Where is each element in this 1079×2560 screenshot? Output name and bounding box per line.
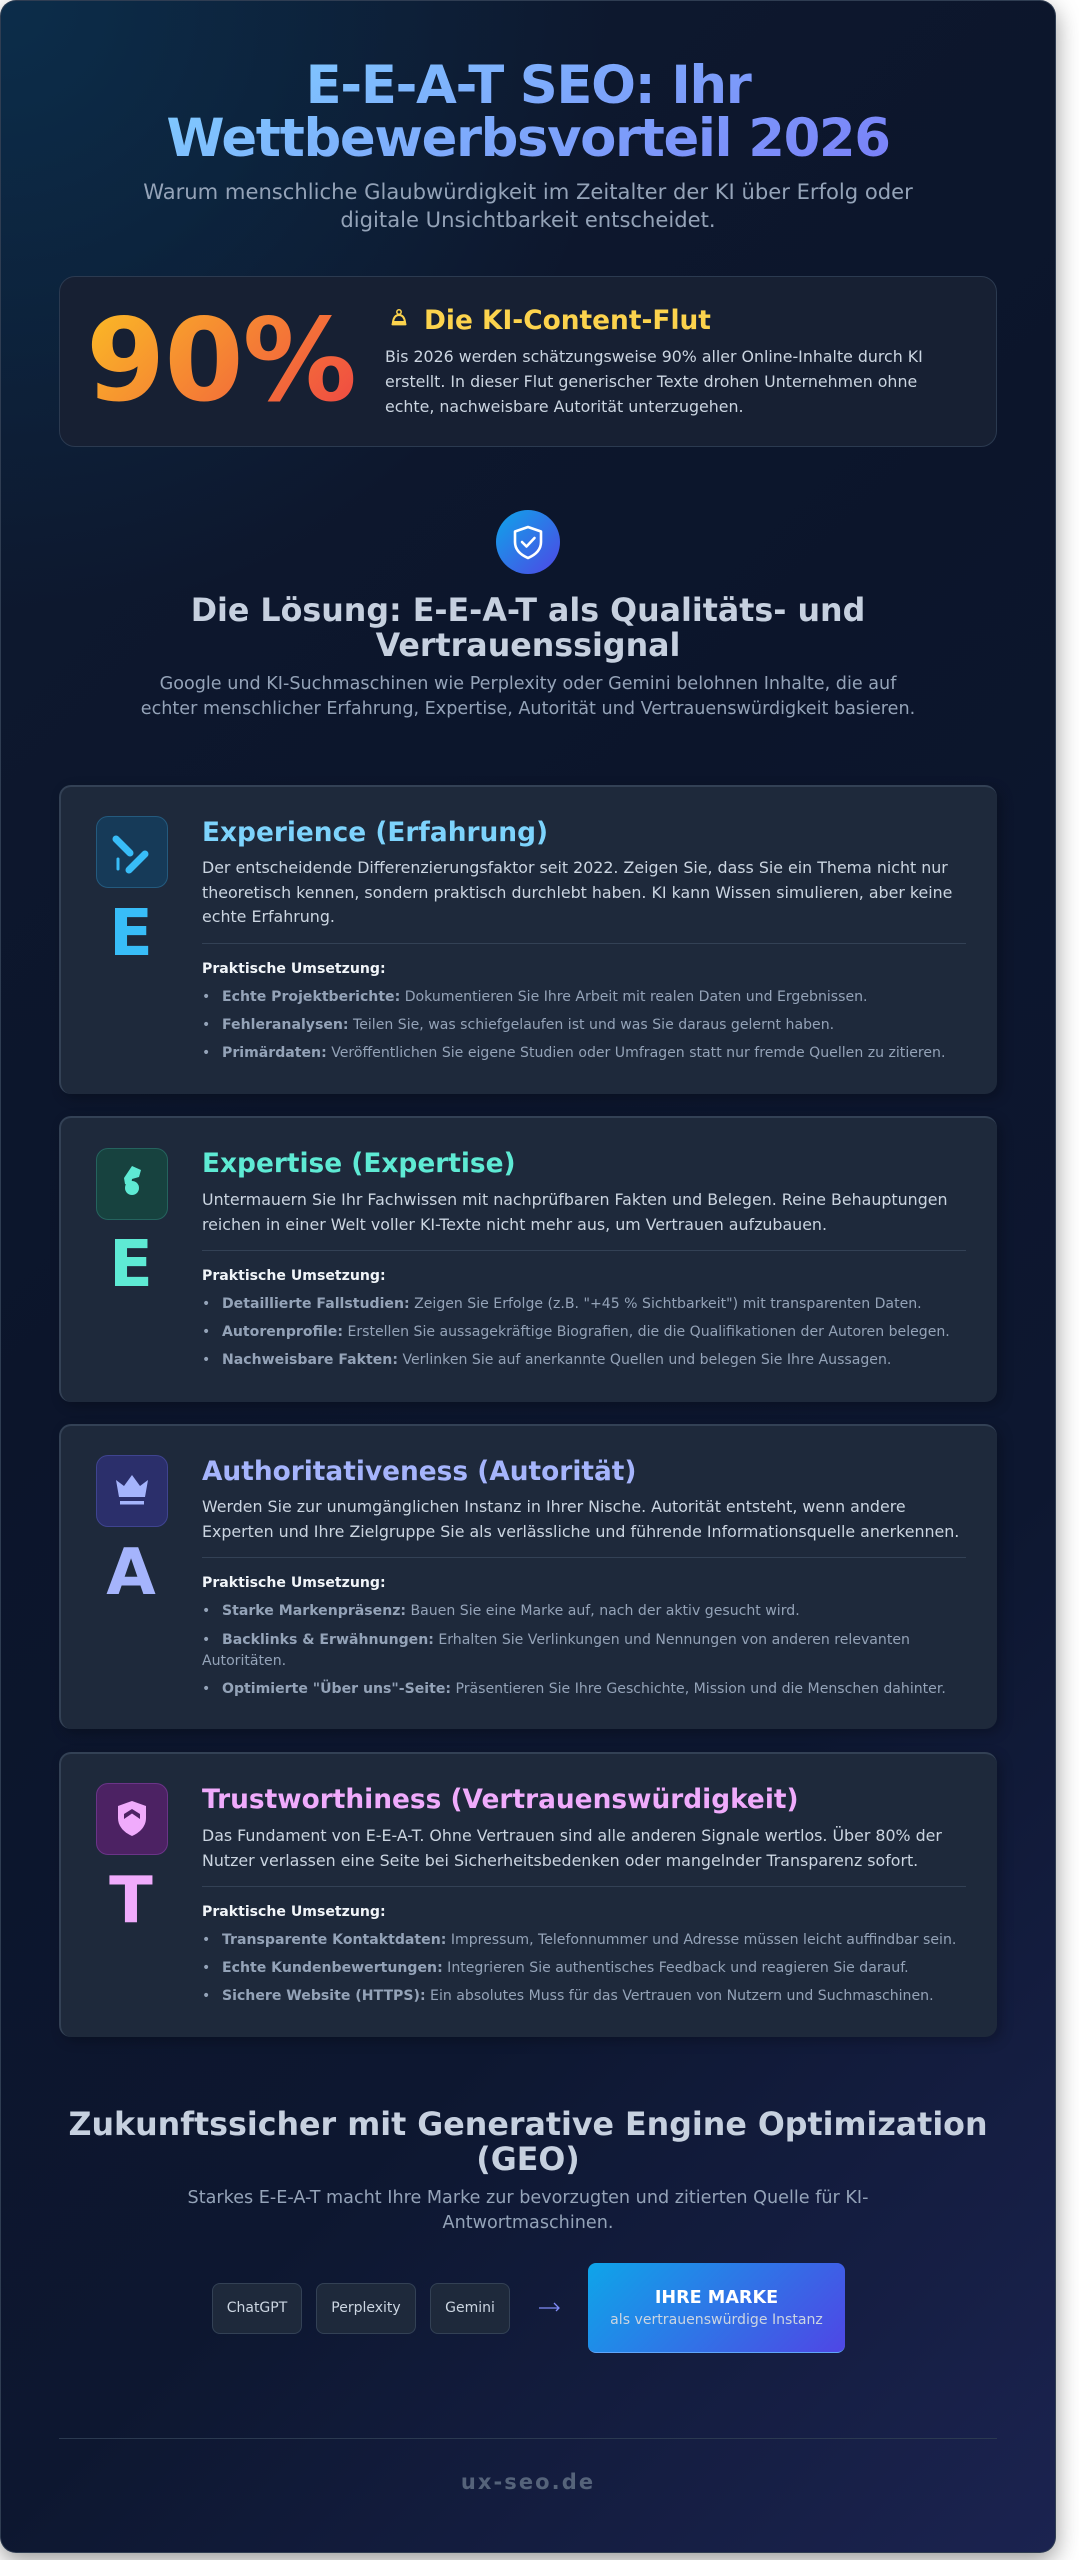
subtitle: digitale Unsichtbarkeit entscheidet. [340, 207, 716, 232]
text: Expertise description: Untermauern Sie Ihr Fachwissen mit nachprüfbaren Fakten und Belegen. Reine Behauptungen [202, 1190, 948, 1209]
list item: Backlinks & Erwähnungen: Erhalten Sie Verlinkungen und Nennungen von anderen relevanten [222, 1632, 910, 1648]
list item: • [202, 1045, 210, 1061]
letter E: E [109, 1228, 153, 1302]
list item: • [202, 1681, 210, 1697]
list item: • [202, 1603, 210, 1619]
icon: shield check [496, 510, 560, 574]
list item: Echte Kundenbewertungen: Integrieren Sie authentisches Feedback und reagieren Sie darauf. [222, 1960, 909, 1976]
text: Expertise description [202, 1190, 948, 1234]
text: Experience description: theoretisch kennen, sondern praktisch durchlebt haben. KI kann Wissen simulieren, aber keine [202, 883, 952, 902]
heading: Trustworthiness: Trustworthiness (Vertrauenswürdigkeit) [202, 1784, 799, 1815]
text: GEO description: Starkes E-E-A-T macht Ihre Marke zur bevorzugten und zitierten Quelle für KI- [188, 2188, 868, 2208]
text: Expertise description: reichen in einer Welt voller KI-Texte nicht mehr aus, um Vertrauen aufzubauen. [202, 1215, 827, 1234]
text: Authoritativeness description: Experten und Ihre Zielgruppe Sie als verlässliche und führende Informationsquelle anerkennen. [202, 1522, 959, 1541]
list item: Nachweisbare Fakten: Verlinken Sie auf anerkannte Quellen und belegen Sie Ihre Aussagen. [222, 1352, 891, 1368]
icon: Authoritativeness [96, 1455, 168, 1527]
list item: Sichere Website (HTTPS): Ein absolutes Muss für das Vertrauen von Nutzern und Suchmaschinen. [222, 1988, 934, 2004]
label: Praktische Umsetzung: Praktische Umsetzung: [202, 1904, 386, 1920]
list item: • [202, 1017, 210, 1033]
brand subtitle: als vertrauenswürdige Instanz [610, 2312, 823, 2328]
list item: Fehleranalysen: Teilen Sie, was schiefgelaufen ist und was Sie daraus gelernt haben. [222, 1017, 834, 1033]
list item: • [202, 1296, 210, 1312]
text: Trustworthiness description [202, 1826, 942, 1870]
subtitle [143, 179, 913, 232]
list item: • [202, 1932, 210, 1948]
list item: • [202, 1352, 210, 1368]
label: Praktische Umsetzung: Praktische Umsetzung: [202, 1268, 386, 1284]
icon: Expertise [96, 1148, 168, 1220]
heading: Expertise: Expertise (Expertise) [202, 1148, 516, 1179]
panel: KI-Content-Flut statistic [59, 276, 997, 447]
label: Praktische Umsetzung: Praktische Umsetzung: [202, 961, 386, 977]
icon: Trustworthiness [96, 1783, 168, 1855]
text: Experience description: echte Erfahrung. [202, 907, 335, 926]
heading: Die Lösung [191, 593, 865, 664]
text: Experience description: Der entscheidende Differenzierungsfaktor seit 2022. Zeigen Sie, dass Sie ein Thema nicht nur [202, 858, 948, 877]
list item: Starke Markenpräsenz: Bauen Sie eine Marke auf, nach der aktiv gesucht wird. [222, 1603, 800, 1619]
chip: Gemini: Gemini [445, 2300, 495, 2316]
arrow [539, 2302, 560, 2312]
text: Lösung description [141, 674, 915, 719]
letter E: E [109, 897, 153, 971]
letter T: T [109, 1864, 153, 1938]
text: Authoritativeness description [202, 1497, 959, 1541]
subtitle: Warum menschliche Glaubwürdigkeit im Zeitalter der KI über Erfolg oder [143, 179, 913, 204]
list item: Primärdaten: Veröffentlichen Sie eigene Studien oder Umfragen statt nur fremde Quellen zu zitieren. [222, 1045, 945, 1061]
list item [202, 1632, 910, 1669]
big number 90%: 90% [86, 294, 356, 427]
letter A: A [106, 1536, 156, 1610]
brand box [588, 2263, 845, 2353]
heading: Die Lösung: Die Lösung: E-E-A-T als Qualitäts- und [191, 593, 865, 629]
heading: GEO: Zukunftssicher mit Generative Engine Optimization [68, 2107, 988, 2143]
heading: GEO: (GEO) [476, 2142, 580, 2178]
list item: Echte Projektberichte: Dokumentieren Sie Ihre Arbeit mit realen Daten und Ergebnissen. [222, 989, 868, 1005]
panel: Expertise card [59, 1116, 997, 1402]
chip: ChatGPT: ChatGPT [227, 2300, 287, 2316]
chip: Perplexity: Perplexity [331, 2300, 401, 2316]
list item: Autorenprofile: Erstellen Sie aussagekräftige Biografien, die die Qualifikationen der Autoren belegen. [222, 1324, 950, 1340]
description [385, 347, 923, 416]
panel: Trustworthiness card [59, 1752, 997, 2037]
panel: Authoritativeness card [59, 1424, 997, 1729]
text: Authoritativeness description: Werden Sie zur unumgänglichen Instanz in Ihrer Nische. Autorität entsteht, wenn andere [202, 1497, 906, 1516]
list item: Detaillierte Fallstudien: Zeigen Sie Erfolge (z.B. "+45 % Sichtbarkeit") mit transparenten Daten. [222, 1296, 922, 1312]
text: Experience description [202, 858, 952, 926]
description: erstellt. In dieser Flut generischer Texte drohen Unternehmen ohne [385, 372, 917, 391]
list item: Autoritäten. [202, 1653, 286, 1669]
description: Bis 2026 werden schätzungsweise 90% aller Online-Inhalte durch KI [385, 347, 923, 366]
brand title: IHRE MARKE [655, 2288, 778, 2308]
title [166, 55, 890, 169]
footer: ux-seo.de: ux-seo.de [461, 2470, 595, 2494]
icon: Experience [96, 816, 168, 888]
chip: Gemini [430, 2283, 510, 2334]
text: Trustworthiness description: Nutzer verlassen eine Seite bei Sicherheitsbedenken oder mangelnder Transparenz sofort. [202, 1851, 918, 1870]
title: Wettbewerbsvorteil 2026 [166, 108, 890, 169]
text: GEO description [188, 2188, 868, 2233]
heading: Experience: Experience (Erfahrung) [202, 817, 548, 848]
icon: bell [392, 309, 406, 326]
list item: • [202, 1632, 210, 1648]
heading: GEO [68, 2107, 988, 2178]
list item: Transparente Kontaktdaten: Impressum, Telefonnummer und Adresse müssen leicht auffindbar sein. [222, 1932, 956, 1948]
list item: • [202, 1324, 210, 1340]
text: GEO description: Antwortmaschinen. [443, 2213, 613, 2233]
chip: ChatGPT [212, 2283, 302, 2334]
description: echte, nachweisbare Autorität unterzugehen. [385, 397, 744, 416]
list item: • [202, 1988, 210, 2004]
text: Trustworthiness description: Das Fundament von E-E-A-T. Ohne Vertrauen sind alle anderen Signale wertlos. Über 80% der [202, 1826, 942, 1845]
heading: Die Lösung: Vertrauenssignal [376, 628, 680, 664]
title: E-E-A-T SEO: Ihr [306, 55, 750, 116]
list item: • [202, 1960, 210, 1976]
list item: • [202, 989, 210, 1005]
chip: Perplexity [316, 2283, 416, 2334]
label: Praktische Umsetzung: Praktische Umsetzung: [202, 1575, 386, 1591]
text: Lösung description: Google und KI-Suchmaschinen wie Perplexity oder Gemini belohnen Inhalte, die auf [160, 674, 896, 694]
panel: Experience card [59, 785, 997, 1094]
list item: Optimierte "Über uns"-Seite: Präsentieren Sie Ihre Geschichte, Mission und die Menschen dahinter. [222, 1681, 946, 1697]
heading: Authoritativeness: Authoritativeness (Autorität) [202, 1456, 636, 1487]
heading: Die KI-Content-Flut [424, 305, 711, 336]
text: Lösung description: echter menschlicher Erfahrung, Expertise, Autorität und Vertrauenswürdigkeit basieren. [141, 699, 915, 719]
